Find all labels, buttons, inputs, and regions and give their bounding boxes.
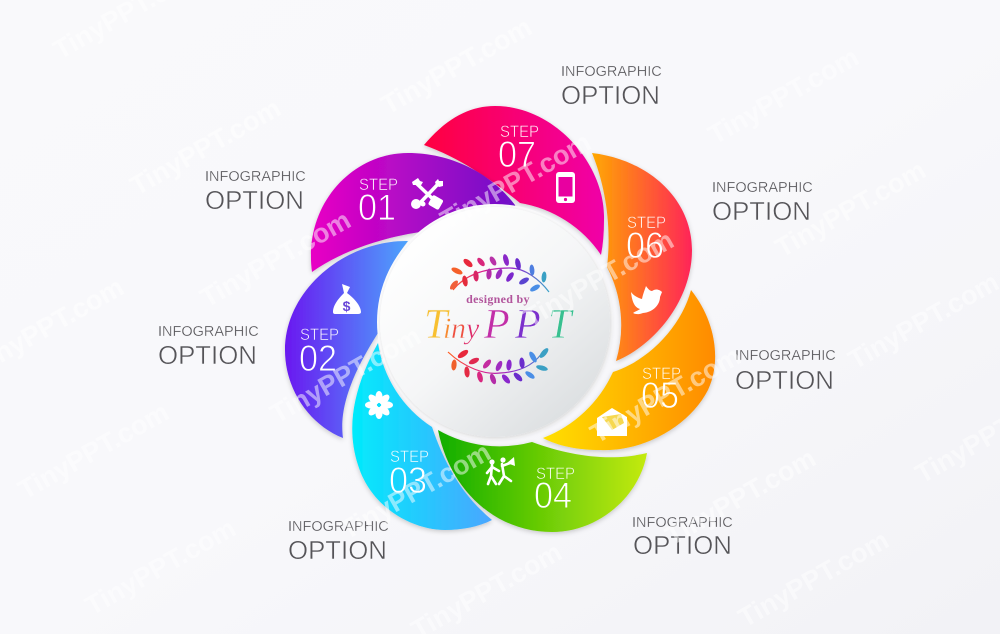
option label: step 07: INFOGRAPHIC bbox=[561, 64, 662, 80]
step 05 label: STEP bbox=[642, 365, 681, 383]
step 01 label: STEP bbox=[359, 176, 398, 194]
text: TinyPPT: n bbox=[451, 312, 466, 345]
step 03 label: STEP bbox=[390, 448, 429, 466]
logo: designed by TinyPPT bbox=[424, 254, 574, 385]
watermarks: TinyPPT.com bbox=[518, 225, 679, 333]
icon: twitter bird bbox=[631, 286, 662, 314]
icon: flower bbox=[365, 391, 393, 419]
step 06 label: 06 bbox=[626, 225, 664, 266]
text: designed by: designed by bbox=[466, 292, 530, 306]
step 04 label: 04 bbox=[534, 475, 572, 516]
step 07 label: STEP bbox=[500, 123, 539, 141]
option label: step 04 bbox=[632, 515, 733, 560]
watermarks: TinyPPT.com bbox=[435, 127, 596, 235]
step 01 label: 01 bbox=[358, 187, 396, 228]
watermarks: TinyPPT.com bbox=[80, 513, 241, 621]
option label: step 03: INFOGRAPHIC bbox=[288, 519, 389, 535]
option label: step 02 bbox=[158, 324, 259, 370]
option label: step 03: OPTION bbox=[288, 537, 387, 565]
watermarks: TinyPPT.com bbox=[703, 42, 864, 150]
petal: step 06 bbox=[592, 153, 692, 361]
option label: step 06: INFOGRAPHIC bbox=[712, 180, 813, 196]
watermarks: TinyPPT.com bbox=[125, 93, 286, 201]
text: TinyPPT: P bbox=[483, 302, 510, 348]
text: TinyPPT: P bbox=[514, 302, 541, 348]
petal: step 04 bbox=[438, 430, 647, 532]
step 03 label: 03 bbox=[389, 460, 427, 501]
step 05 label: 05 bbox=[641, 375, 679, 416]
watermarks: TinyPPT.com bbox=[733, 525, 894, 633]
icon: money bag: $ bbox=[343, 298, 351, 314]
icon: smartphone bbox=[556, 172, 575, 203]
option label: step 05 bbox=[735, 348, 836, 395]
text: TinyPPT: y bbox=[463, 312, 480, 345]
option label: step 05: INFOGRAPHIC bbox=[735, 348, 836, 364]
watermarks: TinyPPT.com bbox=[770, 155, 931, 263]
option label: step 02: INFOGRAPHIC bbox=[158, 324, 259, 340]
option label: step 06 bbox=[712, 180, 813, 226]
icon: running figures with megaphone bbox=[487, 457, 515, 484]
option label: step 01 bbox=[205, 169, 306, 215]
petal: step 02 bbox=[285, 241, 408, 438]
option label: step 03 bbox=[288, 519, 389, 565]
watermarks: TinyPPT.com bbox=[13, 397, 174, 505]
option label: step 07 bbox=[561, 64, 662, 110]
step petals bbox=[285, 106, 715, 532]
step 04 label: STEP bbox=[536, 465, 575, 483]
text: TinyPPT: T bbox=[424, 302, 450, 348]
option label: step 07: OPTION bbox=[561, 82, 660, 110]
option label: step 06: OPTION bbox=[712, 198, 811, 226]
watermarks: TinyPPT.com bbox=[585, 341, 746, 449]
top laurel bbox=[449, 254, 549, 293]
option label: step 01: OPTION bbox=[205, 187, 304, 215]
text: TinyPPT: i bbox=[443, 312, 451, 345]
option label: step 04: OPTION bbox=[633, 532, 732, 560]
petal: step 07 bbox=[424, 106, 604, 255]
petal: step 01 bbox=[311, 153, 520, 272]
petal: step 05 bbox=[543, 290, 715, 450]
option label: step 02: OPTION bbox=[158, 342, 257, 370]
watermarks: TinyPPT.com bbox=[376, 12, 537, 120]
step 02 label: 02 bbox=[299, 338, 337, 379]
center disc bbox=[377, 204, 613, 440]
watermarks: TinyPPT.com bbox=[660, 443, 821, 551]
option label: step 05: OPTION bbox=[735, 367, 834, 395]
icon: crossed keys bbox=[411, 178, 444, 210]
icon: envelope bbox=[597, 408, 627, 436]
petal: step 03 bbox=[352, 343, 492, 530]
watermarks: TinyPPT.com bbox=[843, 267, 1000, 375]
icon: money bag bbox=[333, 284, 361, 314]
bottom laurel bbox=[448, 347, 550, 385]
step 07 label: 07 bbox=[498, 134, 536, 175]
option label: step 04: INFOGRAPHIC bbox=[632, 515, 733, 531]
text: TinyPPT: T bbox=[548, 302, 574, 348]
option label: step 01: INFOGRAPHIC bbox=[205, 169, 306, 185]
watermarks: TinyPPT.com bbox=[335, 437, 496, 545]
step 06 label: STEP bbox=[627, 214, 666, 232]
watermarks: TinyPPT.com bbox=[195, 205, 356, 313]
watermarks: TinyPPT.com bbox=[265, 321, 426, 429]
step 02 label: STEP bbox=[300, 326, 339, 344]
